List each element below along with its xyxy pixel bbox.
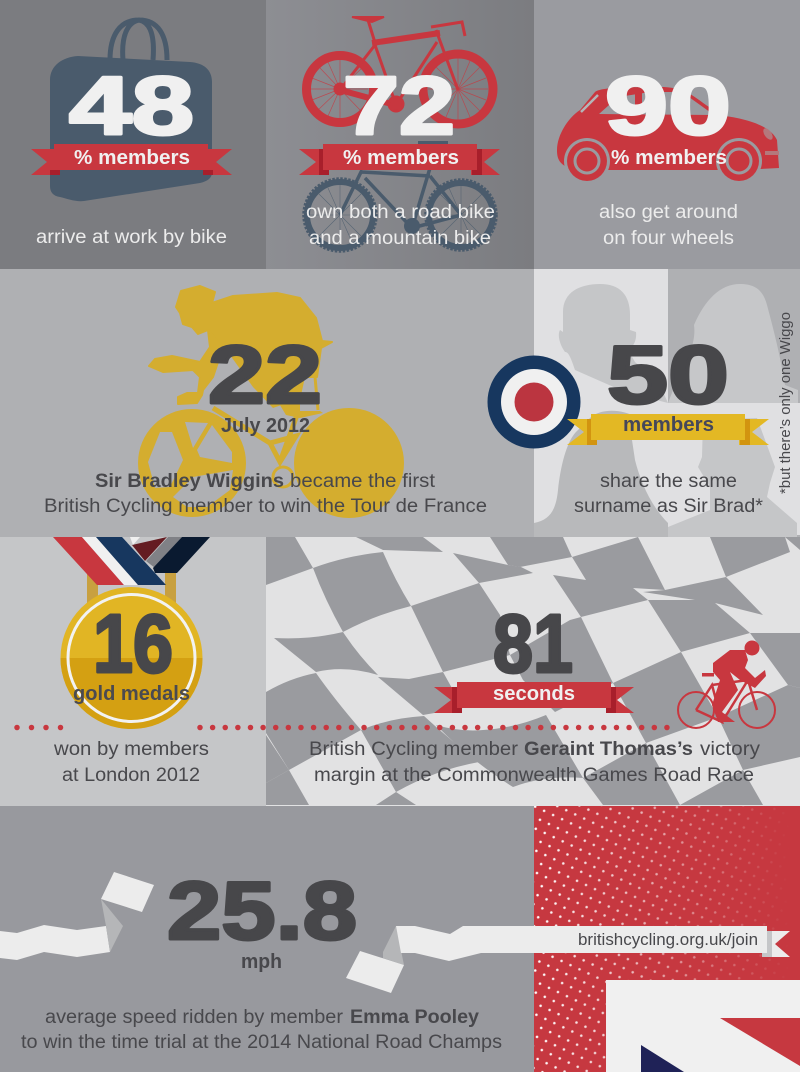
caption: Emma Pooley: average speed ridden by member <box>45 1007 344 1028</box>
number: 50: 50 <box>607 328 729 421</box>
ribbon: % members <box>299 144 500 175</box>
caption: Wiggins <box>44 471 487 517</box>
chequered flag pattern <box>266 537 800 805</box>
icon: red cyclist <box>678 640 775 728</box>
panel: bag statistic <box>0 0 266 269</box>
caption: share the same: share the same <box>600 471 737 492</box>
icon: mountain bike <box>304 143 496 252</box>
ribbon: % members <box>31 144 232 175</box>
halftone dots <box>534 806 800 1072</box>
paper ribbon: url <box>346 926 790 993</box>
number: 72: 72 <box>343 59 455 152</box>
number: 90: 90 <box>605 59 731 152</box>
caption: won by members <box>53 739 209 786</box>
unit: mph: mph <box>241 951 282 973</box>
panel: bikes statistic <box>266 0 534 269</box>
number: 48: 48 <box>69 59 194 152</box>
panel: join <box>534 806 800 1072</box>
date: July 2012: July 2012 <box>221 415 310 437</box>
number: 81: 81 <box>493 597 573 690</box>
caption: Geraint Thomas: Geraint Thomas’s <box>524 739 693 760</box>
caption: Wiggins: Sir Bradley Wiggins <box>95 471 284 492</box>
icon: medal <box>53 537 210 729</box>
caption: Wiggins: British Cycling member to win the Tour de France <box>44 496 487 517</box>
caption: Emma Pooley <box>21 1007 502 1053</box>
caption: won by members: at London 2012 <box>62 765 200 786</box>
icon: road bike <box>306 17 493 124</box>
icon: roundel <box>488 356 580 448</box>
label: gold medals: gold medals <box>73 683 190 705</box>
caption: also get around <box>599 202 738 249</box>
caption: Geraint Thomas <box>309 739 761 786</box>
icon: silhouettes <box>534 284 798 537</box>
caption: also get around: also get around <box>599 202 738 223</box>
ribbon: members <box>567 414 769 445</box>
icon: yellow cyclist <box>138 286 404 518</box>
icon: bag <box>50 20 212 201</box>
icon: car <box>557 87 779 184</box>
footnote: Wiggo: *but there’s only one Wiggo <box>777 312 794 494</box>
number: 22: 22 <box>208 328 322 421</box>
number: 25.8: 25.8 <box>167 864 357 957</box>
caption: Wiggins: became the first <box>290 471 436 492</box>
caption: Emma Pooley: Emma Pooley <box>350 1007 479 1028</box>
caption: Geraint Thomas: British Cycling member <box>309 739 519 760</box>
caption: own both <box>306 202 495 249</box>
ribbon: seconds: seconds <box>493 683 575 705</box>
caption: share the same <box>574 471 764 517</box>
ribbon: % members: % members <box>74 147 190 169</box>
icon: union flag corner <box>606 980 800 1072</box>
caption: Emma Pooley: to win the time trial at the 2014 National Road Champs <box>21 1032 502 1053</box>
dotted line <box>17 725 668 730</box>
panel: Tour de France <box>0 269 534 537</box>
caption: own both: and a mountain bike <box>309 228 491 249</box>
ribbon: % members: % members <box>343 147 459 169</box>
label: % members: % members <box>611 147 727 169</box>
caption: own both: own both a road bike <box>306 202 495 223</box>
caption: also get around: on four wheels <box>603 228 734 249</box>
caption: share the same: surname as Sir Brad* <box>574 496 764 517</box>
panel: gold medals <box>0 537 266 806</box>
panel: car statistic <box>534 0 800 269</box>
caption: arrive at work: arrive at work by bike <box>36 227 227 248</box>
paper ribbon: left <box>0 872 154 960</box>
ribbon: seconds <box>434 682 634 713</box>
panel: surname <box>488 269 800 537</box>
number: 16: 16 <box>93 597 173 690</box>
panel: speed <box>0 806 534 1072</box>
caption: Geraint Thomas: victory <box>700 739 761 760</box>
paper ribbon: url: britishcycling.org.uk/join <box>578 930 758 949</box>
caption: Geraint Thomas: margin at the Commonwealth Games Road Race <box>314 765 754 786</box>
caption: won by members: won by members <box>53 739 209 760</box>
ribbon: members: members <box>623 414 714 436</box>
panel: chequered flag <box>266 537 800 806</box>
